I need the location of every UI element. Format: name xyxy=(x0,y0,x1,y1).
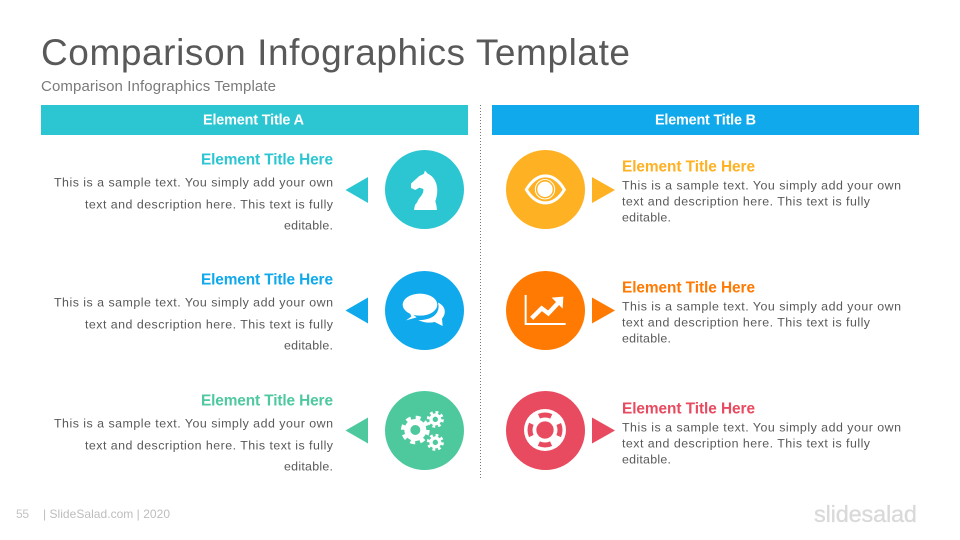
icon: eye xyxy=(506,150,585,229)
text block: A1: text and description here. This text is fully xyxy=(85,198,334,212)
arrow: B3 xyxy=(592,418,615,444)
text block: B1: editable. xyxy=(622,210,671,224)
text block: A2: text and description here. This text is fully xyxy=(85,318,334,332)
arrow: A2 xyxy=(346,298,368,324)
text block: B2: This is a sample text. You simply add your own xyxy=(622,300,901,314)
panel: item A2 xyxy=(54,271,464,352)
text block: B1: This is a sample text. You simply add your own xyxy=(622,178,901,192)
icon: chat bubbles xyxy=(385,271,464,350)
panel: header A: Element Title A xyxy=(203,112,305,128)
icon: lifebuoy xyxy=(506,391,585,470)
arrow: A1 xyxy=(346,177,368,203)
icon: gears xyxy=(385,391,464,470)
heading: A3: Element Title Here xyxy=(201,392,333,410)
text block: A2: This is a sample text. You simply add your own xyxy=(54,296,333,310)
footer: page number: 55 xyxy=(16,507,29,521)
text block: A1 xyxy=(54,176,334,232)
panel: item B1 xyxy=(506,150,901,229)
text block: A1: editable. xyxy=(284,218,333,232)
heading: A2: Element Title Here xyxy=(201,272,333,288)
text block: B2: text and description here. This text is fully xyxy=(622,316,871,330)
footer: credit: | SlideSalad.com | 2020 xyxy=(43,507,170,521)
text block: B3: This is a sample text. You simply add your own xyxy=(622,420,901,434)
panel: header A xyxy=(41,105,468,135)
arrow: B2 xyxy=(592,298,615,324)
text block: A1: This is a sample text. You simply add your own xyxy=(54,176,333,190)
text block: B3: editable. xyxy=(622,452,671,466)
text block: B1 xyxy=(622,178,901,224)
text block: B3: text and description here. This text is fully xyxy=(622,436,871,450)
text block: B2: editable. xyxy=(622,332,671,346)
text block: A3 xyxy=(54,416,334,474)
heading: B2: Element Title Here xyxy=(622,280,755,296)
panel: item A3 xyxy=(54,391,464,474)
heading: A1: Element Title Here xyxy=(201,152,333,168)
text block: B3 xyxy=(622,420,901,466)
arrow: A3 xyxy=(346,418,368,444)
icon: growth chart xyxy=(506,271,585,350)
text block: B2 xyxy=(622,300,901,346)
panel: item B2 xyxy=(506,271,901,350)
subtitle: Comparison Infographics Template xyxy=(41,78,276,95)
arrow: B1 xyxy=(592,177,615,203)
heading: B3: Element Title Here xyxy=(622,400,755,418)
panel: item B3 xyxy=(506,391,901,470)
panel: header B: Element Title B xyxy=(655,112,756,128)
logo: slidesalad: slidesalad xyxy=(814,501,917,527)
text block: A3: text and description here. This text is fully xyxy=(85,438,334,452)
heading: B1: Element Title Here xyxy=(622,158,755,176)
text block: B1: text and description here. This text is fully xyxy=(622,194,871,208)
text block: A3: editable. xyxy=(284,460,333,474)
text block: A2: editable. xyxy=(284,338,333,352)
icon: chess knight xyxy=(385,150,464,229)
title: Comparison Infographics Template xyxy=(41,32,630,73)
panel: header B xyxy=(492,105,919,135)
panel: item A1 xyxy=(54,150,464,232)
text block: A3: This is a sample text. You simply add your own xyxy=(54,416,333,430)
text block: A2 xyxy=(54,296,334,352)
